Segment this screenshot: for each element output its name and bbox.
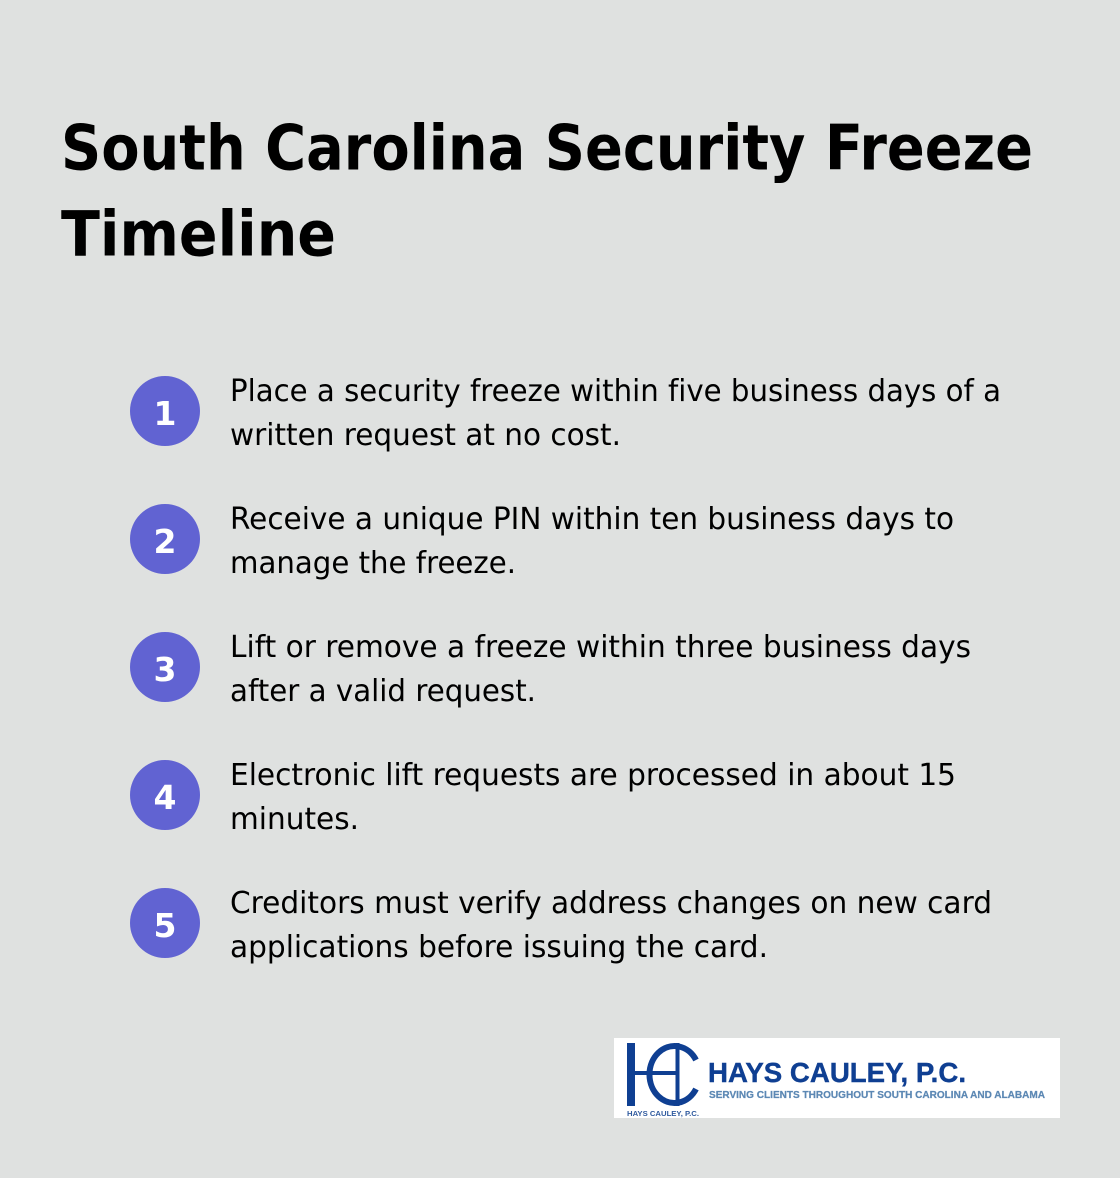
step 2 text: manage the freeze. — [230, 546, 516, 581]
step 4 number badge: 4 — [154, 778, 176, 817]
step 3 text — [230, 630, 971, 709]
title — [61, 112, 1033, 270]
step 3 number badge — [130, 632, 200, 702]
step 2 number badge — [130, 504, 200, 574]
step 5 text — [230, 886, 992, 965]
step 1 text — [230, 374, 1001, 453]
step 4 — [130, 758, 956, 837]
step 2 — [130, 502, 954, 581]
title: South Carolina Security Freeze — [61, 112, 1033, 184]
step 1 — [130, 374, 1001, 453]
logo name: HAYS CAULEY, P.C. — [708, 1057, 966, 1088]
step 5 number badge — [130, 888, 200, 958]
step 4 number badge — [130, 760, 200, 830]
step 3 text: after a valid request. — [230, 674, 536, 709]
step 5 text: Creditors must verify address changes on new card — [230, 886, 992, 921]
logo: Hays Cauley, P.C. — [614, 1038, 1060, 1118]
step 1 text: Place a security freeze within five business days of a — [230, 374, 1001, 409]
title: Timeline — [61, 198, 336, 270]
step 3 — [130, 630, 971, 709]
step 4 text: minutes. — [230, 802, 359, 837]
step 5 number badge: 5 — [154, 906, 176, 945]
step 3 text: Lift or remove a freeze within three business days — [230, 630, 971, 665]
step 5 — [130, 886, 992, 965]
icon: HC monogram — [627, 1043, 696, 1106]
logo small caption: HAYS CAULEY, P.C. — [627, 1109, 699, 1118]
step 1 number badge: 1 — [154, 394, 176, 433]
step 3 number badge: 3 — [154, 650, 176, 689]
step 2 text: Receive a unique PIN within ten business days to — [230, 502, 954, 537]
step 1 text: written request at no cost. — [230, 418, 621, 453]
step 5 text: applications before issuing the card. — [230, 930, 768, 965]
steps list — [130, 374, 1001, 965]
step 4 text — [230, 758, 956, 837]
step 2 number badge: 2 — [154, 522, 176, 561]
step 4 text: Electronic lift requests are processed in about 15 — [230, 758, 956, 793]
step 2 text — [230, 502, 954, 581]
step 1 number badge — [130, 376, 200, 446]
logo tagline: SERVING CLIENTS THROUGHOUT SOUTH CAROLINA AND ALABAMA — [709, 1089, 1045, 1101]
